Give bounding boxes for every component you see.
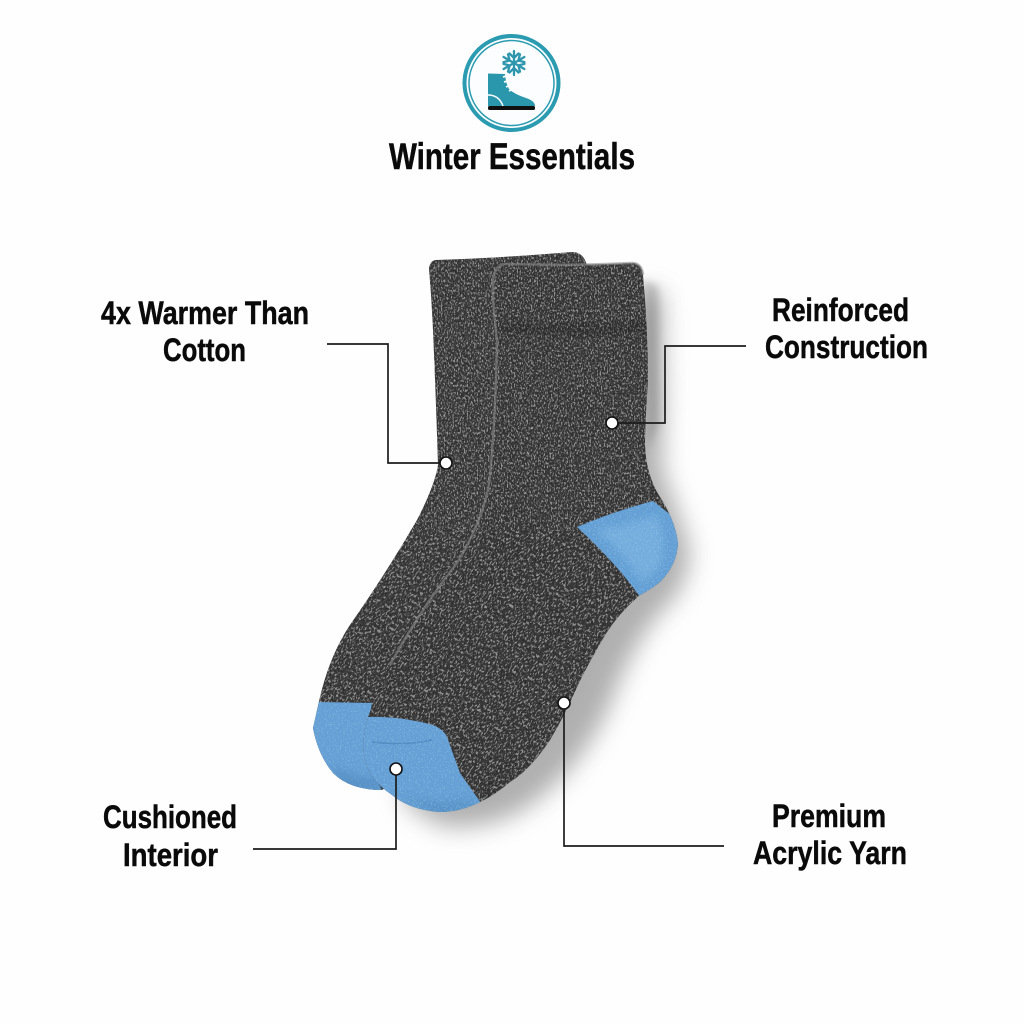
callout: reinforced construction <box>606 292 928 429</box>
label text: 4x Warmer Than <box>101 295 309 331</box>
blue knit texture <box>364 717 480 812</box>
label text: Reinforced <box>772 292 909 328</box>
label text: Cotton <box>163 332 246 368</box>
title: Winter Essentials <box>389 136 635 177</box>
icon: snowflake <box>501 51 527 75</box>
marker dot <box>440 457 452 469</box>
icon: boot with snowflake badge <box>464 36 558 130</box>
leader line <box>564 709 724 846</box>
marker dot <box>606 417 618 429</box>
label text: Cushioned <box>103 799 237 835</box>
callout: premium acrylic yarn <box>558 697 907 871</box>
leader line <box>618 346 746 423</box>
front sock heel <box>577 501 678 596</box>
back sock toe <box>313 702 381 790</box>
label text: Construction <box>765 329 928 365</box>
front sock toe <box>364 716 480 812</box>
marker dot <box>390 763 402 775</box>
back sock <box>313 252 586 790</box>
label text: Premium <box>772 798 886 834</box>
icon: boot <box>488 74 535 110</box>
socks illustration <box>313 252 702 841</box>
label text <box>101 295 309 368</box>
marker dot <box>558 697 570 709</box>
label text <box>753 798 907 871</box>
leader line <box>327 344 440 463</box>
label text: Acrylic Yarn <box>753 835 907 871</box>
sock shadow <box>400 280 690 827</box>
callout: 4x warmer than cotton <box>101 295 452 469</box>
front sock <box>364 262 678 812</box>
callout: cushioned interior <box>103 763 402 873</box>
label text <box>765 292 928 365</box>
label text: Interior <box>123 837 218 873</box>
leader line <box>253 775 396 849</box>
front sock stitched edge <box>390 263 643 665</box>
infographic <box>101 34 927 871</box>
label text <box>103 799 237 873</box>
